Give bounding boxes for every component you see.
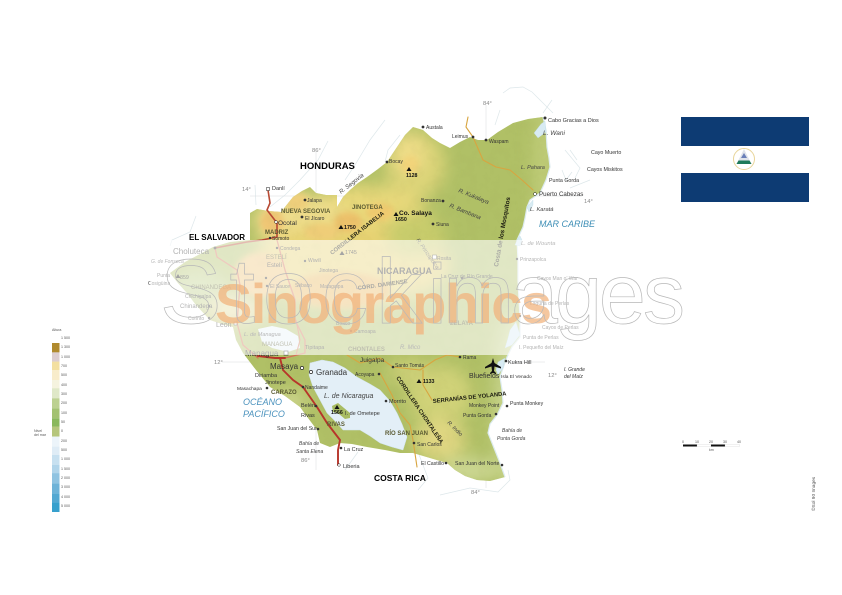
- map: city and town labels: Ocotal: [278, 220, 297, 227]
- legend labels: 400: [61, 383, 67, 387]
- map: city and town labels: Cayos Man o' War: [537, 276, 578, 282]
- map: Ometepe island: [332, 403, 350, 419]
- map: city and town labels: La Cruz: [344, 447, 364, 453]
- map: city and town labels: Choluteca: [173, 247, 210, 256]
- map: city and town labels: Danlí: [272, 186, 285, 192]
- map: peaks with elevation: Co. Salaya: [399, 210, 432, 217]
- credit line: ©Sol 90 Images: [810, 476, 817, 511]
- legend: elevation scale: [34, 328, 70, 512]
- map: city and town labels: Masachapa: [237, 386, 262, 392]
- map: Lake Nicaragua: [309, 360, 407, 450]
- watermark: outlined word: Stock: [160, 241, 423, 343]
- legend labels: 200: [61, 439, 67, 443]
- map: roads: [215, 117, 533, 467]
- map: water and bay labels: R. Indio: [446, 420, 463, 438]
- map: city and town labels: Masaya: [270, 362, 299, 371]
- map: water and bay labels: [151, 130, 565, 455]
- map: city and town labels: Granada: [316, 368, 348, 377]
- map: city and town labels: Puerto Cabezas: [539, 191, 583, 198]
- map: city and town labels: Monkey Point: [469, 403, 500, 409]
- map: city and town labels: Jinotepe: [265, 380, 286, 386]
- legend labels: 200: [61, 401, 67, 405]
- map: water and bay labels: R. Prinzapolca: [414, 238, 440, 270]
- map: city and town labels: Bluefields: [469, 373, 500, 380]
- watermark: outlined word images: images: [428, 247, 685, 341]
- map: peaks with elevation: 859: [180, 275, 189, 281]
- map: city and town labels: Corinto: [188, 316, 204, 322]
- legend labels: 5 000: [61, 504, 70, 508]
- map: mountain range labels: CORDILLERA CHONTALEÑA: [394, 375, 445, 446]
- map: city and town labels: Boaco: [336, 321, 350, 327]
- legend labels: del mar: [34, 433, 47, 437]
- map: city and town labels: El Sauce: [270, 284, 290, 290]
- map: city and town labels: Rivas: [301, 413, 315, 419]
- map: city and town labels: Punta Gorda: [463, 413, 492, 419]
- legend labels: Nivel: [34, 429, 42, 433]
- graticule labels: 14°: [584, 199, 593, 205]
- label: Océano Pacífico: OCÉANO: [243, 397, 282, 407]
- map: city and town labels: Prinzapolca: [520, 257, 546, 263]
- legend labels: 50: [61, 420, 65, 424]
- map: city and town labels: Estelí: [267, 263, 282, 269]
- map: city and town labels: Cayos Miskitos: [587, 167, 623, 173]
- map: city and town labels: Somoto: [272, 236, 289, 242]
- graticule labels: 14°: [242, 187, 251, 193]
- map: mountain range labels: CORDILLERA ISABELIA: [330, 210, 386, 257]
- map: city and town labels: Cabo Gracias a Dios: [548, 118, 599, 124]
- map: city and town labels: I. Grande: [564, 367, 585, 373]
- legend labels: 100: [61, 411, 67, 415]
- map: city and town labels: Matagalpa: [320, 284, 344, 290]
- legend labels: Altura: [52, 328, 61, 332]
- map: city and town labels: Nandaime: [305, 385, 328, 391]
- graticule labels: [214, 101, 593, 496]
- map: mountain range labels: CORD. DARIENSE: [357, 279, 408, 292]
- map: region labels: MADRIZ: [265, 230, 289, 236]
- map: region labels: ZELAYA: [450, 321, 474, 327]
- map: city and town labels: Tipitapa: [305, 345, 325, 351]
- label: Océano Pacífico: [243, 397, 285, 419]
- map: region labels: RIVAS: [327, 422, 345, 428]
- map: city and town labels: Diriamba: [255, 373, 278, 379]
- map: city and town labels: Juigalpa: [360, 357, 385, 364]
- map: water and bay labels: R. Mico: [400, 345, 421, 351]
- map: water and bay labels: R. Kukalaya: [457, 188, 490, 206]
- map: city and town labels: I. Pequeño del Maíz: [519, 345, 564, 351]
- map: city and town labels: Cayos de Perlas: [542, 325, 579, 331]
- legend labels: [34, 328, 70, 508]
- map: city and town labels: El Jícaro: [305, 216, 325, 222]
- map: peaks with elevation: 1745: [345, 250, 357, 256]
- map: city and town labels: Laguna de Perlas: [530, 301, 570, 307]
- map: water and bay labels: R. Segovia: [339, 172, 366, 196]
- map: city and town labels: Cosigüina: [148, 281, 170, 287]
- scale bar: 20: [709, 440, 713, 444]
- map: city and town labels: Morrito: [389, 399, 406, 405]
- legend labels: 3 000: [61, 485, 70, 489]
- map: peaks with elevation: [176, 167, 435, 416]
- scale bar: [682, 440, 741, 452]
- legend labels: 700: [61, 364, 67, 368]
- legend labels: 1 500: [61, 467, 70, 471]
- map: water and bay labels: R. Bambana: [448, 203, 482, 222]
- legend labels: 500: [61, 448, 67, 452]
- map: city and town labels: Siuna: [436, 222, 449, 228]
- map: region labels: MANAGUA: [262, 342, 292, 348]
- map: peaks with elevation: 1566: [331, 410, 343, 416]
- map: city and town labels: Sébaco: [295, 283, 312, 289]
- map: city and town labels: Waspam: [489, 139, 509, 145]
- map: region labels: CHONTALES: [348, 347, 385, 353]
- map: region labels: [191, 205, 474, 437]
- map: region labels: NICARAGUA: [377, 266, 432, 276]
- map: water and bay labels: Bahía de: [502, 428, 522, 434]
- map: Nicaragua coastline: [488, 117, 550, 477]
- map: peaks with elevation: 1650: [395, 217, 407, 223]
- map: city and town labels: Wiwilí: [308, 258, 322, 264]
- map: region labels: CHINANDEGA: [191, 285, 231, 291]
- map: region labels: NUEVA SEGOVIA: [281, 209, 331, 215]
- graticule labels: 12°: [214, 360, 223, 366]
- watermark: washed band: [150, 240, 690, 355]
- map: city and town labels: I. de Ometepe: [345, 411, 380, 417]
- map: water and bay labels: L. Pahara: [521, 165, 545, 171]
- map: water and bay labels: L. Karatá: [530, 207, 554, 213]
- map: city and town labels: Jalapa: [307, 198, 322, 204]
- map: region labels: ESTELÍ: [266, 254, 287, 261]
- graticule labels: 86°: [312, 148, 321, 154]
- legend labels: 300: [61, 392, 67, 396]
- map: city and town labels: San Carlos: [417, 442, 442, 448]
- map: city and town labels: San Juan del Sur: [277, 426, 317, 432]
- map: Nicaragua relief: [170, 117, 550, 481]
- map: city and town labels: Jinotega: [319, 268, 338, 274]
- map: water and bay labels: L. de Wounta: [521, 241, 556, 247]
- map: city and town labels: Punta Monkey: [510, 401, 544, 407]
- map: city and town labels: Austala: [426, 125, 443, 131]
- scale bar: 0: [682, 440, 684, 444]
- map: city and town labels: Chichigalpa: [185, 294, 211, 300]
- map: city and town labels: Bocay: [389, 159, 403, 165]
- graticule labels: 12°: [548, 373, 557, 379]
- map: mountain range labels: [330, 196, 512, 446]
- legend labels: 500: [61, 373, 67, 377]
- legend labels: 2 000: [61, 476, 70, 480]
- graticule labels: 84°: [483, 101, 492, 107]
- map: city and town labels: Cayo Muerto: [591, 150, 621, 156]
- map: region labels: CARAZO: [271, 390, 297, 396]
- map: city and town labels: Belén: [301, 403, 315, 409]
- map: water and bay labels: L. de Nicaragua: [324, 393, 374, 400]
- label: Costa Rica: COSTA RICA: [374, 473, 426, 483]
- graticule labels: 86°: [301, 458, 310, 464]
- legend labels: 1 300: [61, 345, 70, 349]
- map: neighbouring-country borders and rivers: [170, 87, 590, 495]
- map: Lake Managua: [258, 326, 300, 352]
- map: city and town labels: del Maíz: [564, 374, 583, 380]
- label: Mar Caribe: MAR CARIBE: [539, 219, 596, 229]
- map: water and bay labels: Bahía de: [299, 441, 319, 447]
- label: Océano Pacífico: PACÍFICO: [243, 409, 285, 419]
- legend labels: 1 000: [61, 355, 70, 359]
- map: city and town labels: Kukra Hill: [508, 360, 532, 366]
- legend labels: 1 500: [61, 336, 70, 340]
- map: city and town labels: Leimus: [452, 134, 469, 140]
- map: peaks with elevation: 1133: [423, 379, 435, 385]
- map: graticule lines: [222, 105, 582, 488]
- map: city and town labels: Rama: [463, 355, 477, 361]
- map: city and town labels: Acoyapa: [355, 372, 375, 378]
- map: city and town labels: Punta: [157, 273, 170, 279]
- map: city and town labels: Camoapa: [354, 329, 376, 335]
- map: mountain range labels: Costa de los Mosquitos: [493, 196, 512, 267]
- map: water and bay labels: Punta Gorda: [497, 436, 526, 442]
- legend labels: 4 000: [61, 495, 70, 499]
- label: Honduras: HONDURAS: [300, 161, 355, 172]
- map: city and town labels: Liberia: [343, 464, 360, 470]
- map: region labels: RÍO SAN JUAN: [385, 429, 428, 437]
- map: water and bay labels: L. Wani: [543, 130, 565, 137]
- map: mountain range labels: SERRANÍAS DE YOLANDA: [432, 389, 508, 405]
- map: city and town labels: Isla El Venado: [501, 374, 532, 380]
- flag of Nicaragua: [681, 117, 809, 202]
- map: region labels: JINOTEGA: [352, 205, 383, 211]
- map: water and bay labels: G. de Fonseca: [151, 259, 184, 265]
- legend labels: 1 000: [61, 457, 70, 461]
- map: city and town labels: Rosita: [437, 256, 451, 262]
- map: city and town labels: Punta Gorda: [549, 178, 579, 184]
- map: water and bay labels: Santa Elena: [296, 449, 323, 455]
- icon: airport plane: [485, 358, 501, 374]
- map: peaks with elevation: 1750: [344, 225, 356, 231]
- scale bar: km: [709, 448, 714, 452]
- map: city and town labels: [148, 116, 623, 470]
- graticule labels: 84°: [471, 490, 480, 496]
- scale bar: 40: [737, 440, 741, 444]
- scale bar: 30: [723, 440, 727, 444]
- map: city and town labels: El Castillo: [421, 461, 444, 467]
- map: city and town labels: Chinandega: [180, 304, 213, 310]
- map: peaks with elevation: 1128: [406, 173, 418, 179]
- map: city and town labels: La Cruz de Río Grande: [441, 274, 493, 280]
- legend colour bar: [52, 343, 60, 512]
- map: city and town labels: Managua: [245, 349, 279, 358]
- map: water and bay labels: L. de Managua: [244, 332, 281, 338]
- legend labels: 0: [61, 429, 63, 433]
- scale bar: 10: [695, 440, 699, 444]
- label: El Salvador: EL SALVADOR: [189, 233, 245, 242]
- map: lagoons: [496, 121, 546, 375]
- map: city and town labels: Condega: [280, 246, 301, 252]
- watermark: orange wordmark: Sinographics: [215, 272, 552, 335]
- map: city and town labels: San Juan del Norte: [455, 461, 500, 467]
- map: city and town labels: Bonanza: [421, 198, 441, 204]
- map: city and town labels: León: [216, 322, 232, 329]
- map: city and town labels: Santo Tomás: [395, 363, 425, 369]
- map: city and town labels: Punta de Perlas: [523, 335, 559, 341]
